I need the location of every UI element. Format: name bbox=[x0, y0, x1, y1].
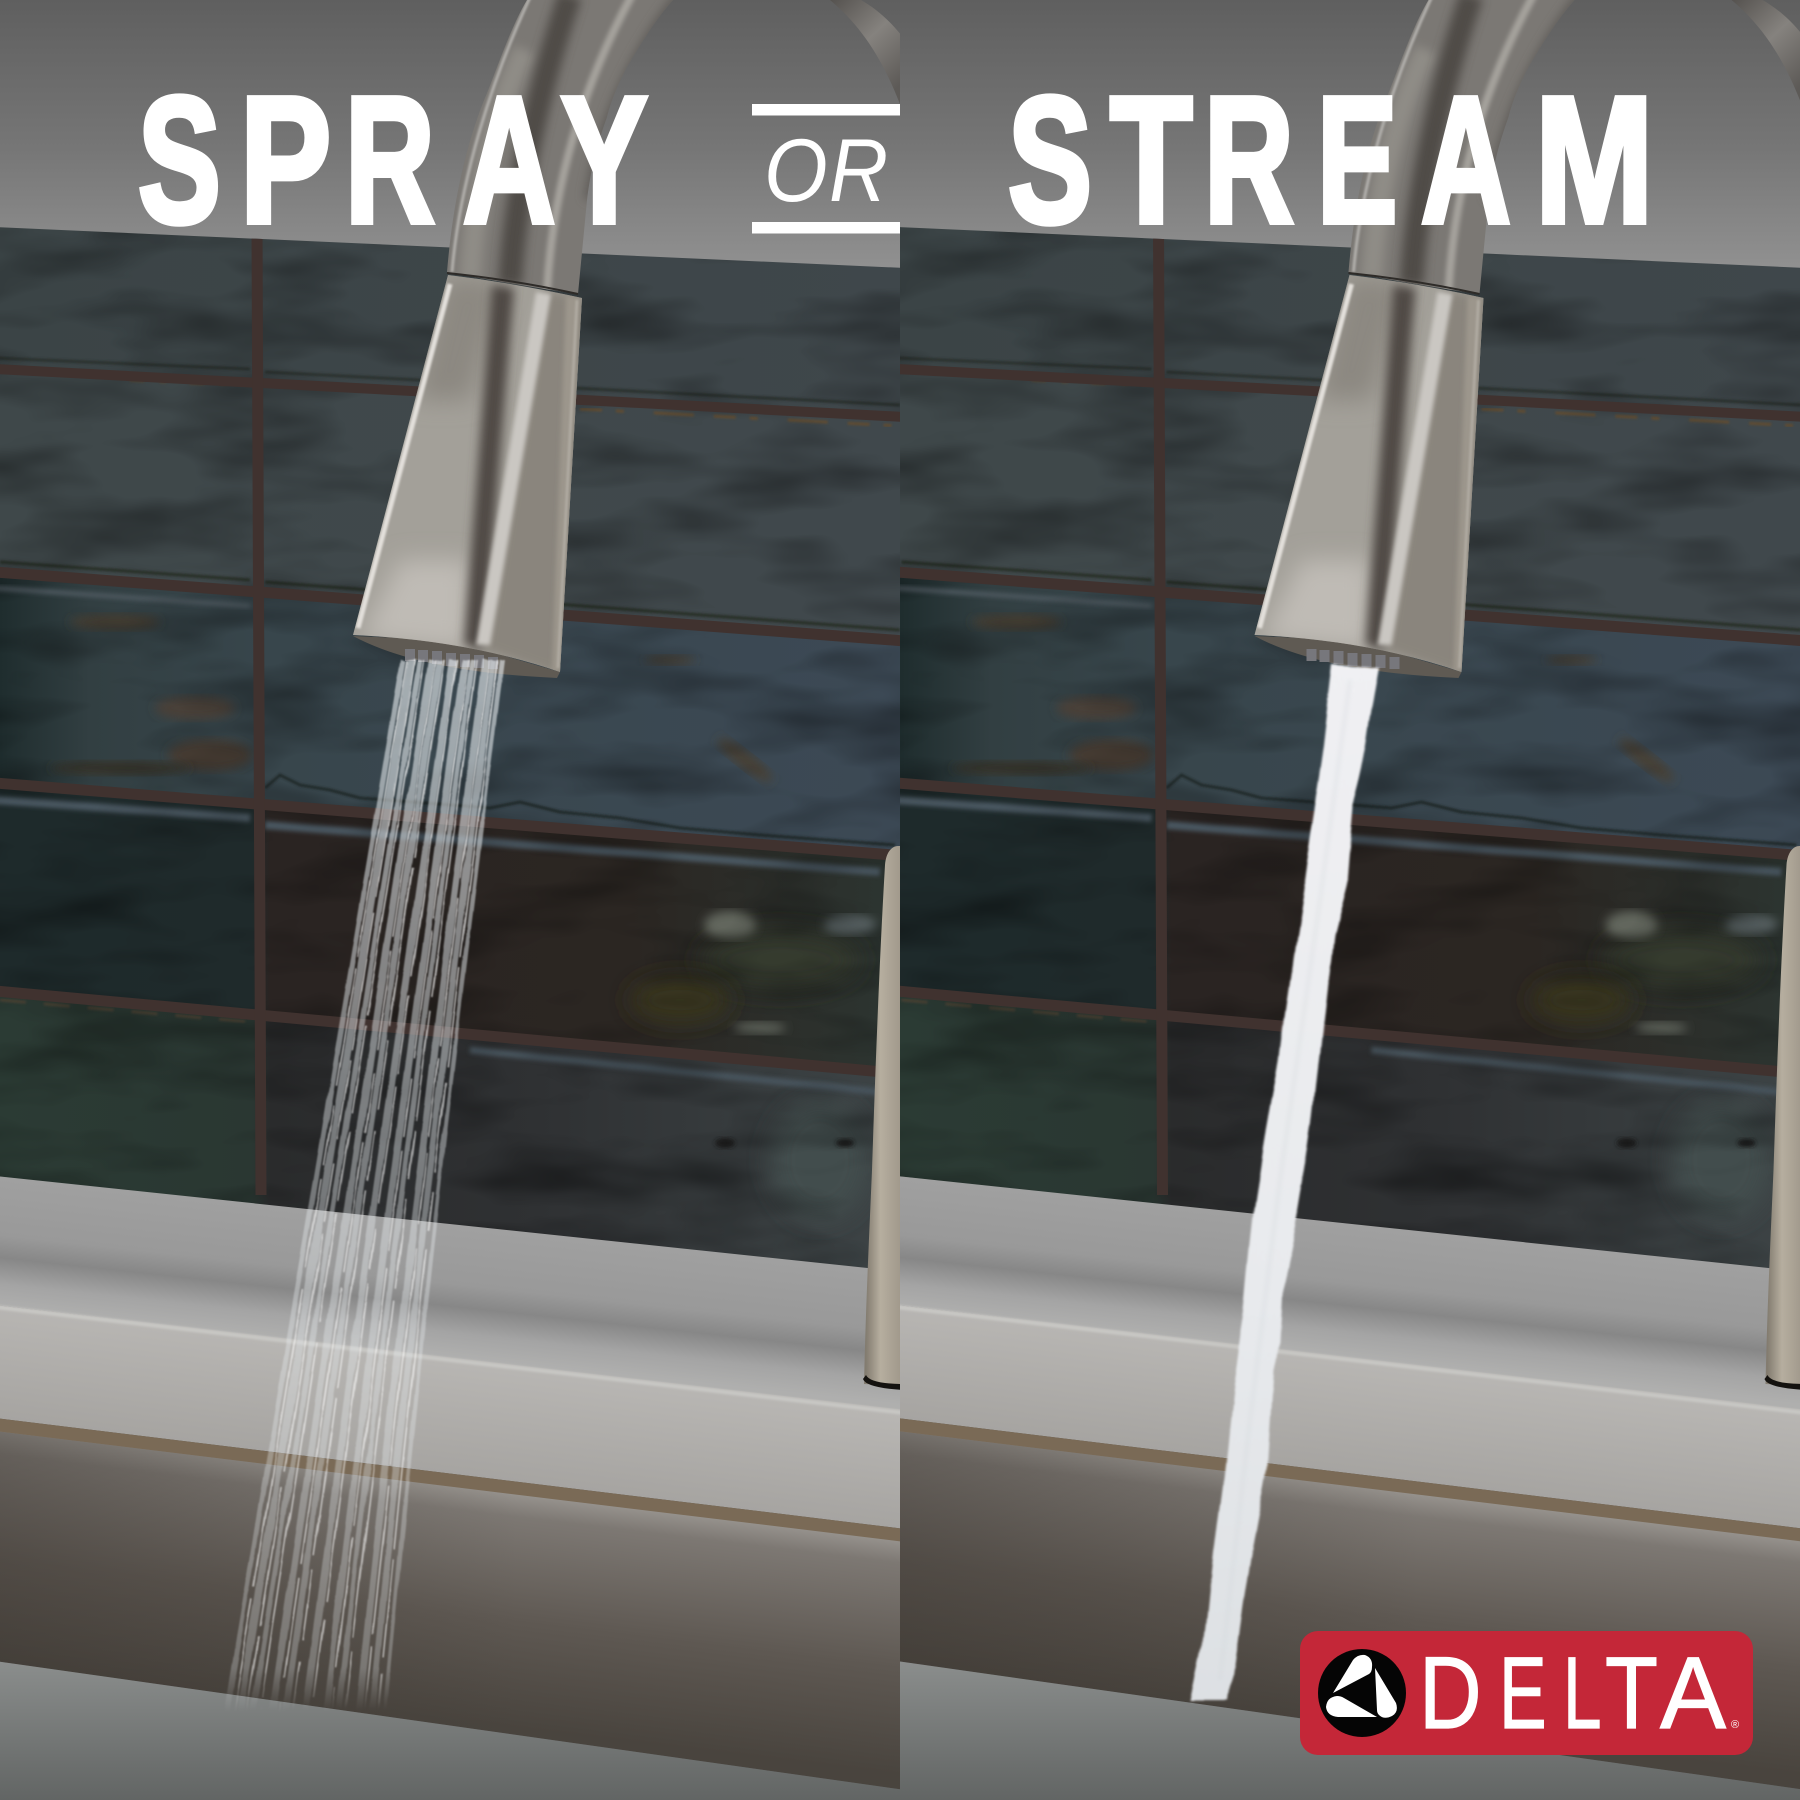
wordmark: DELTA: D bbox=[1419, 1636, 1482, 1751]
title: SPRAY bbox=[138, 59, 647, 261]
divider: OR: R bbox=[829, 122, 888, 221]
title: STREAM: T bbox=[1110, 59, 1192, 260]
faucet base bbox=[1764, 846, 1800, 1390]
dark glazed tile backsplash bbox=[896, 220, 1800, 1280]
title: SPRAY: S bbox=[138, 59, 221, 260]
divider: OR bbox=[752, 104, 900, 234]
panel: spray (left) bbox=[0, 0, 900, 1800]
wordmark: DELTA: L bbox=[1563, 1637, 1602, 1750]
sink basin bbox=[0, 1431, 905, 1800]
wordmark: DELTA: A bbox=[1660, 1637, 1726, 1750]
title: STREAM: R bbox=[1204, 59, 1294, 260]
spray water pattern bbox=[227, 660, 502, 1710]
wordmark: DELTA bbox=[1419, 1635, 1739, 1751]
sink basin bbox=[896, 1431, 1800, 1800]
divider: OR: O bbox=[764, 122, 828, 221]
panel: stream (right) bbox=[900, 0, 1800, 1800]
icon: Delta triad bbox=[1318, 1649, 1406, 1737]
faucet base bbox=[863, 846, 905, 1390]
title: SPRAY: Y bbox=[561, 60, 647, 261]
faucet spray head bbox=[353, 273, 590, 680]
title: STREAM: A bbox=[1421, 59, 1511, 260]
title: SPRAY: A bbox=[463, 61, 555, 261]
wordmark: DELTA: ® bbox=[1731, 1719, 1739, 1731]
quartz countertop bbox=[0, 1176, 905, 1543]
spray nozzles bbox=[1306, 649, 1400, 669]
faucet gooseneck bbox=[447, 0, 905, 294]
title: SPRAY: P bbox=[240, 59, 331, 260]
title: STREAM: E bbox=[1317, 60, 1397, 261]
title: STREAM: M bbox=[1535, 60, 1653, 261]
wordmark: DELTA: E bbox=[1499, 1635, 1547, 1750]
quartz countertop bbox=[896, 1176, 1800, 1543]
Delta logo badge bbox=[1300, 1631, 1753, 1755]
faucet gooseneck bbox=[1348, 0, 1800, 294]
title: SPRAY: R bbox=[345, 59, 435, 260]
spray nozzles bbox=[405, 649, 498, 669]
grey upper wall bbox=[896, 0, 1800, 300]
grey upper wall bbox=[0, 0, 905, 300]
title: STREAM: S bbox=[1008, 59, 1092, 260]
title: STREAM bbox=[1008, 59, 1653, 261]
wordmark: DELTA: T bbox=[1605, 1636, 1658, 1751]
dark glazed tile backsplash bbox=[0, 220, 905, 1280]
solid water stream bbox=[1192, 665, 1380, 1703]
faucet spray head bbox=[1254, 273, 1492, 680]
